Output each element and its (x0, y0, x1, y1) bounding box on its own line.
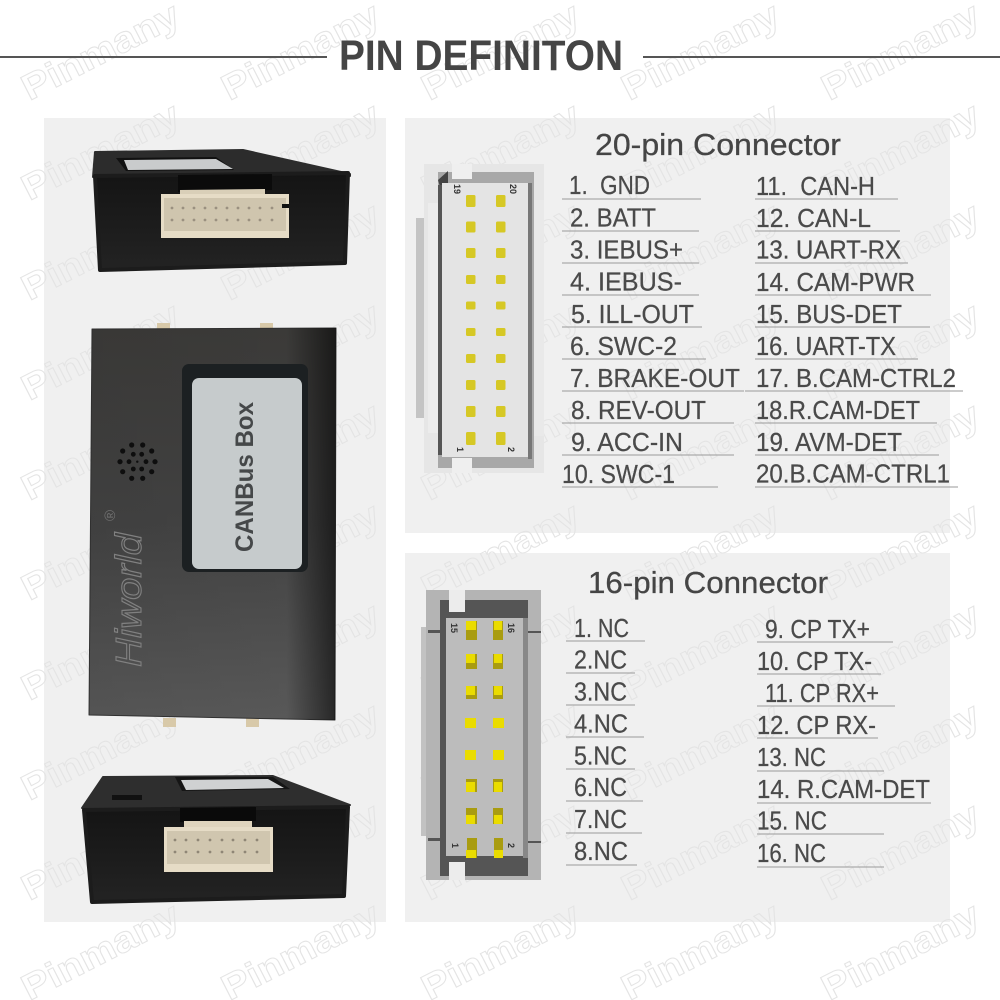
pin 4: 4.NC (574, 710, 628, 738)
watermark: Pinmany repeated: Pinmany (814, 294, 986, 408)
pin 19: 19. AVM-DET (756, 429, 902, 457)
pin numbers 15 and 16: 16 (506, 623, 516, 633)
16-pin socket on box (164, 821, 273, 872)
pin 5: 5. ILL-OUT (571, 301, 694, 329)
pin 8: 8. REV-OUT (571, 397, 706, 425)
watermark: Pinmany repeated: Pinmany (814, 694, 986, 808)
pin 20: 20.B.CAM-CTRL1 (756, 460, 950, 488)
watermark: Pinmany repeated: Pinmany (814, 194, 986, 308)
yellow pins, 16-pin (465, 621, 504, 858)
pin 2: 2.NC (574, 646, 627, 674)
panel: 20-pin connector (405, 118, 950, 533)
photo: CANBus box bottom view with 16-pin socket (82, 776, 350, 902)
pin 1: 1. GND (569, 172, 650, 200)
watermark: Pinmany repeated: Pinmany (414, 394, 586, 508)
pin numbers 1 and 2 (455, 447, 516, 452)
watermark: Pinmany repeated: Pinmany (814, 394, 986, 508)
watermark: Pinmany repeated: Pinmany (214, 194, 386, 308)
pin 2 (562, 204, 699, 232)
20-pin socket on box (161, 194, 289, 238)
pin 14: 14. R.CAM-DET (757, 776, 930, 804)
watermark: Pinmany repeated: Pinmany (214, 694, 386, 808)
pin numbers 1 and 2: 2 (506, 447, 516, 452)
pin 3: 3. IEBUS+ (570, 236, 683, 264)
watermark: Pinmany repeated: Pinmany (214, 394, 386, 508)
pin 4: 4. IEBUS- (570, 268, 682, 296)
watermark: Pinmany repeated: Pinmany (614, 294, 786, 408)
pin numbers 19 and 20: 20 (508, 184, 518, 194)
pin numbers 19 and 20 (452, 184, 518, 194)
pin 13 (757, 744, 884, 772)
watermark: Pinmany repeated: Pinmany (14, 0, 186, 108)
label plate (192, 378, 302, 569)
pin 11: 11. CAN-H (756, 173, 875, 201)
watermark: Pinmany repeated: Pinmany (614, 794, 786, 908)
photo: CANBus box top view with 20-pin socket (93, 150, 350, 270)
pin list: 20-pin connector right column (745, 173, 963, 488)
pin 10: 10. CP TX- (757, 648, 872, 676)
watermark: Pinmany repeated: Pinmany (414, 0, 586, 108)
pin 7: 7. BRAKE-OUT (570, 365, 740, 393)
watermark: Pinmany repeated: Pinmany (214, 0, 386, 108)
watermark: Pinmany repeated: Pinmany (614, 0, 786, 108)
pin 16: 16. NC (757, 840, 826, 868)
watermark: Pinmany repeated: Pinmany (214, 794, 386, 908)
watermark: Pinmany repeated: Pinmany (214, 494, 386, 608)
label text: CANBus Box (231, 402, 259, 552)
pin numbers 19 and 20: 19 (452, 184, 462, 194)
watermark: Pinmany repeated: Pinmany (414, 794, 586, 908)
pin list: 16-pin connector right column (757, 616, 931, 868)
watermark: Pinmany repeated: Pinmany (14, 94, 186, 208)
yellow pins, 20-pin (466, 195, 506, 445)
pin 1: 1. NC (574, 615, 629, 643)
pin 2: 2. BATT (570, 204, 656, 232)
watermark: Pinmany repeated: Pinmany (614, 694, 786, 808)
watermark: Pinmany repeated: Pinmany (414, 594, 586, 708)
pin 14: 14. CAM-PWR (756, 269, 915, 297)
pin 6: 6. SWC-2 (570, 333, 677, 361)
watermark: Pinmany repeated: Pinmany (414, 494, 586, 608)
pin 9: 9. ACC-IN (571, 429, 683, 457)
pin 3: 3.NC (574, 678, 627, 706)
watermark: Pinmany repeated: Pinmany (614, 394, 786, 508)
icon: speaker holes (117, 442, 158, 481)
diagram: 16-pin connector (421, 590, 541, 880)
label window (182, 364, 308, 572)
watermark: Pinmany repeated: Pinmany (14, 394, 186, 508)
pin 15: 15. NC (757, 808, 827, 836)
pin 15: 15. BUS-DET (756, 301, 902, 329)
watermark: Pinmany repeated: Pinmany (814, 794, 986, 908)
watermark: Pinmany repeated: Pinmany (814, 494, 986, 608)
watermark: Pinmany repeated: Pinmany (614, 94, 786, 208)
watermark: Pinmany repeated: Pinmany (14, 594, 186, 708)
heading: 16-pin connector: 16-pin Connector (588, 565, 828, 600)
pin 6: 6.NC (574, 774, 627, 802)
panel: product photos (44, 118, 386, 922)
pin 13: 13. NC (757, 744, 826, 772)
mounting tabs (157, 323, 273, 727)
photo: CANBus box face view (89, 323, 336, 727)
pin 8: 8.NC (574, 838, 628, 866)
pin 7: 7.NC (574, 806, 627, 834)
heading: pin definition: PIN DEFINITON (339, 32, 623, 80)
pin 16 (757, 840, 884, 868)
pin 5: 5.NC (574, 742, 627, 770)
pin numbers 1 and 2: 1 (455, 447, 465, 452)
diagram: 20-pin connector (416, 164, 544, 473)
watermark: Pinmany repeated: Pinmany (414, 294, 586, 408)
watermark: Pinmany repeated: Pinmany (14, 694, 186, 808)
watermark: Pinmany repeated: Pinmany (614, 594, 786, 708)
box body (89, 328, 336, 720)
pin numbers 1 and 2: 2 (506, 843, 516, 848)
watermark: Pinmany repeated: Pinmany (814, 594, 986, 708)
pin numbers 1 and 2 (450, 843, 516, 848)
watermark: Pinmany repeated: Pinmany (14, 294, 186, 408)
pin 12: 12. CP RX- (757, 712, 876, 740)
watermark: Pinmany repeated: Pinmany (14, 494, 186, 608)
pin list: 16-pin connector left column (566, 615, 645, 866)
heading: 20-pin connector: 20-pin Connector (595, 127, 841, 162)
pin 16: 16. UART-TX (756, 333, 896, 361)
pin 13: 13. UART-RX (756, 236, 901, 264)
pin 9: 9. CP TX+ (765, 616, 870, 644)
pin 12: 12. CAN-L (756, 205, 871, 233)
watermark: Pinmany repeated: Pinmany (214, 94, 386, 208)
panel: 16-pin connector (405, 553, 950, 922)
watermark: Pinmany repeated: Pinmany (614, 494, 786, 608)
pin 10: 10. SWC-1 (562, 461, 675, 489)
pin numbers 15 and 16 (449, 623, 516, 633)
watermark: Pinmany repeated: Pinmany (414, 194, 586, 308)
watermark: Pinmany repeated: Pinmany (214, 594, 386, 708)
pin 18: 18.R.CAM-DET (756, 397, 920, 425)
pin numbers 1 and 2: 1 (450, 843, 460, 848)
pin 15 (757, 808, 884, 836)
registered mark: ® (102, 510, 119, 521)
pin 17: 17. B.CAM-CTRL2 (756, 365, 956, 393)
watermark: Pinmany repeated: Pinmany (814, 94, 986, 208)
pin 1 (562, 172, 701, 200)
brand text: Hiworld (108, 532, 149, 667)
watermark: Pinmany repeated: Pinmany (414, 694, 586, 808)
watermark: Pinmany repeated: Pinmany (414, 94, 586, 208)
watermark: Pinmany repeated: Pinmany (214, 294, 386, 408)
pin numbers 15 and 16: 15 (449, 623, 459, 633)
pin list: 20-pin connector left column (562, 172, 744, 489)
watermark: Pinmany repeated: Pinmany (14, 194, 186, 308)
watermark: Pinmany repeated: Pinmany (814, 0, 986, 108)
watermark: Pinmany repeated: Pinmany (614, 194, 786, 308)
watermark: Pinmany repeated: Pinmany (14, 794, 186, 908)
pin 11: 11. CP RX+ (765, 680, 879, 708)
